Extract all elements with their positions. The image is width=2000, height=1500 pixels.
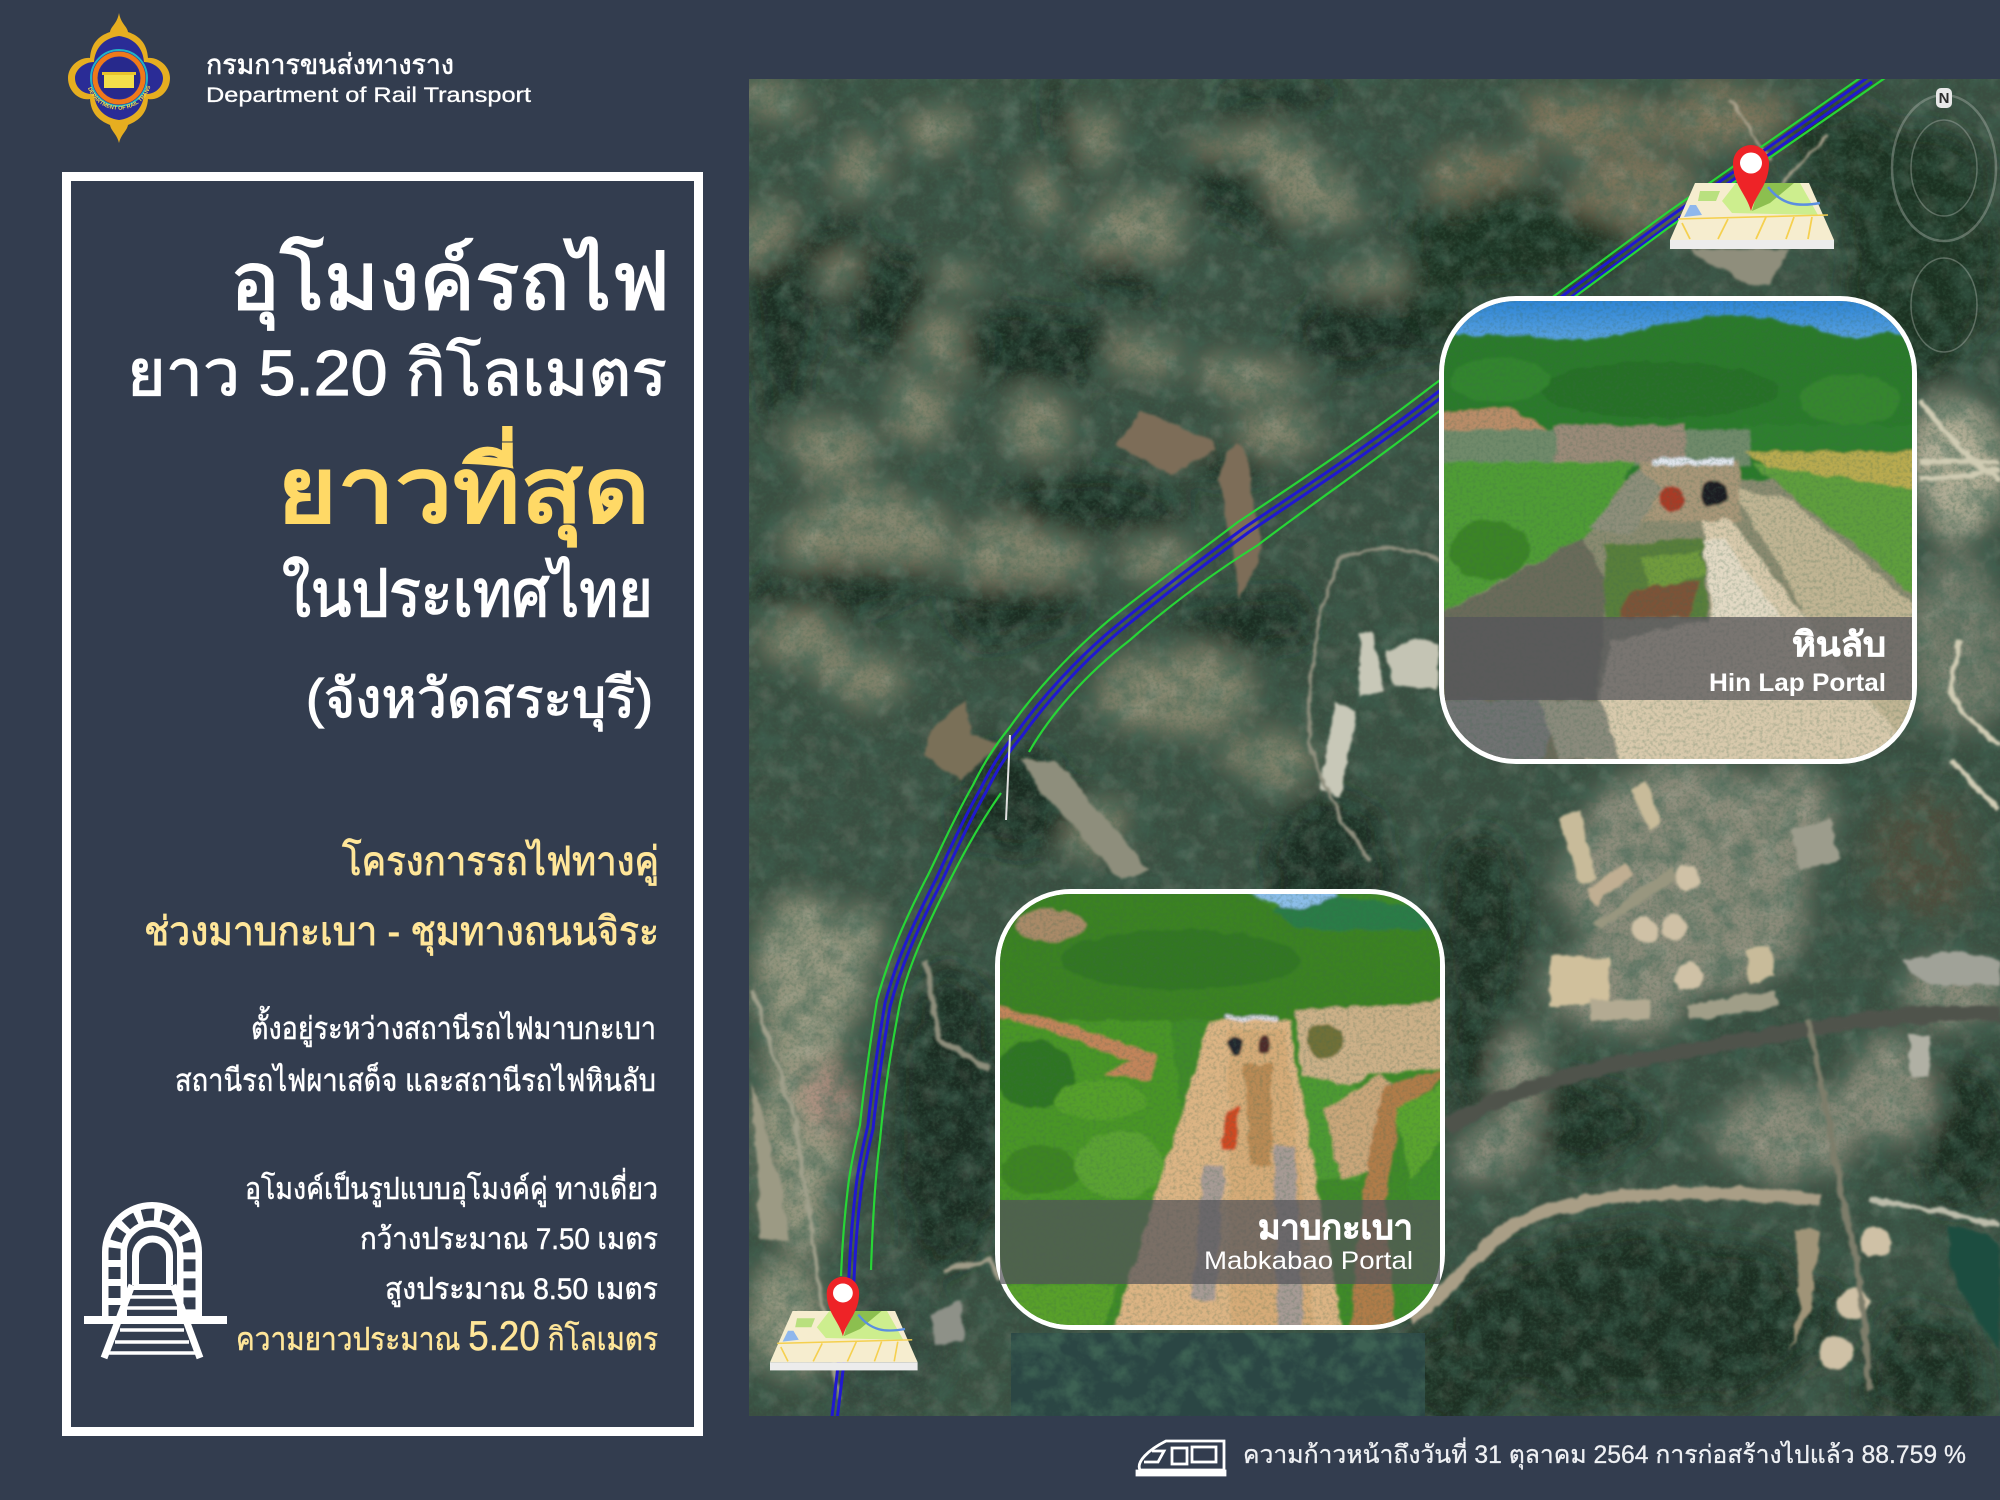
text block: dimensions: สูงประมาณ 8.50 เมตร	[385, 1273, 658, 1307]
photo: Mabkabao portal	[990, 885, 1450, 1340]
map detail: reservoir	[1948, 1225, 2000, 1350]
caption band: หินลับ	[1792, 626, 1886, 664]
photo scene: bottom left	[990, 1284, 1118, 1340]
compass north marker	[1936, 88, 1952, 108]
map detail	[752, 100, 2000, 1400]
compass north marker: N	[1939, 90, 1949, 107]
text block: dimensions: กว้างประมาณ 7.50 เมตร	[360, 1223, 658, 1256]
photo scene: portal	[1640, 462, 1740, 522]
header: organisation name	[206, 49, 531, 107]
map detail: north-east tracks	[1730, 100, 1830, 245]
photo scene: centre road	[1585, 520, 1925, 770]
photo scene: left bushes	[1430, 462, 1635, 620]
photo scene: right yard	[1295, 1000, 1450, 1110]
map detail: quarry plant	[1359, 631, 1383, 698]
photo scene: left foreground forest	[990, 1020, 1190, 1200]
header: organisation name: Department of Rail Transport	[206, 84, 531, 107]
photo scene: centre vegetation	[1603, 538, 1707, 618]
photo scene: platform	[1110, 1021, 1345, 1340]
map detail: plant buildings	[1550, 780, 2000, 1075]
subheading: project name: ช่วงมาบกะเบา - ชุมทางถนนจิระ	[144, 910, 659, 956]
header: organisation name: กรมการขนส่งทางราง	[206, 49, 454, 80]
photo: Hin Lap portal	[1430, 296, 1925, 770]
photo scene: back hills	[1235, 885, 1335, 912]
subheading: project name	[144, 839, 659, 956]
text block: location: ตั้งอยู่ระหว่างสถานีรถไฟมาบกะเบา	[251, 1006, 656, 1047]
icon: railway tunnel	[84, 1215, 227, 1358]
map detail: south-west strips	[752, 990, 840, 1400]
text block: length highlight: ความยาวประมาณ 5.20 กิโลเมตร	[236, 1312, 658, 1359]
north-east farmland	[1430, 86, 1790, 226]
location pin: Mabkabao	[770, 1277, 918, 1370]
quarry	[1910, 400, 2000, 540]
subheading: project name: โครงการรถไฟทางคู่	[342, 839, 659, 885]
title: main headline	[127, 236, 670, 732]
photo scene: left stepped slope	[1590, 470, 1662, 536]
caption band: Hin Lap Portal	[1709, 669, 1886, 697]
map detail: farm clearings	[1115, 410, 1215, 475]
logo: Department of Rail Transport seal	[68, 13, 170, 143]
title: main headline: ยาว 5.20 กิโลเมตร	[127, 337, 667, 409]
panel: tunnel facts	[66, 176, 698, 1432]
text block: location	[175, 1006, 656, 1098]
location pin: Hin Lap	[1670, 145, 1834, 249]
photo scene: site	[1430, 408, 1552, 432]
text block: dimensions: อุโมงค์เป็นรูปแบบอุโมงค์คู่ ทางเดี่ยว	[245, 1168, 658, 1208]
caption band	[1000, 1200, 1440, 1284]
dark pasted patch under photo	[1011, 1333, 1425, 1416]
text block: location: สถานีรถไฟผาเสด็จ และสถานีรถไฟหินลับ	[175, 1062, 656, 1098]
text block: dimensions	[245, 1168, 658, 1307]
title: main headline: (จังหวัดสระบุรี)	[306, 669, 653, 732]
caption band	[1445, 617, 1912, 700]
photo scene: dirt road	[990, 1005, 1157, 1080]
route: rail alignment	[832, 78, 1885, 1420]
south-west patchy ground	[754, 890, 884, 1380]
map detail: highway	[1446, 1013, 2000, 1126]
satellite map	[739, 75, 2000, 1430]
caption band: มาบกะเบา	[1258, 1209, 1413, 1247]
title: main headline: อุโมงค์รถไฟ	[230, 236, 670, 330]
map detail: tan ridge	[1410, 1193, 1821, 1320]
industrial zone	[1450, 760, 2000, 1180]
photo scene: portals	[1229, 1036, 1242, 1054]
caption band: Mabkabao Portal	[1204, 1247, 1413, 1275]
south-east hills	[1390, 830, 2000, 1430]
texture overlay	[749, 79, 2000, 1416]
footer: progress note	[1137, 1437, 1966, 1475]
title: main headline: ในประเทศไทย	[282, 556, 653, 630]
compass rings	[1892, 95, 1996, 352]
photo scene: hills	[1430, 315, 1925, 480]
footer: progress note: ความก้าวหน้าถึงวันที่ 31 ตุลาคม 2564 การก่อสร้างไปแล้ว 88.759 %	[1243, 1437, 1966, 1470]
title: main headline: ยาวที่สุด	[277, 425, 650, 548]
photo scene: right bank and slope	[1752, 464, 1925, 606]
photo scene: foreground	[1430, 700, 1560, 770]
terrain blobs	[739, 75, 2000, 1430]
icon: train	[1137, 1441, 1225, 1475]
